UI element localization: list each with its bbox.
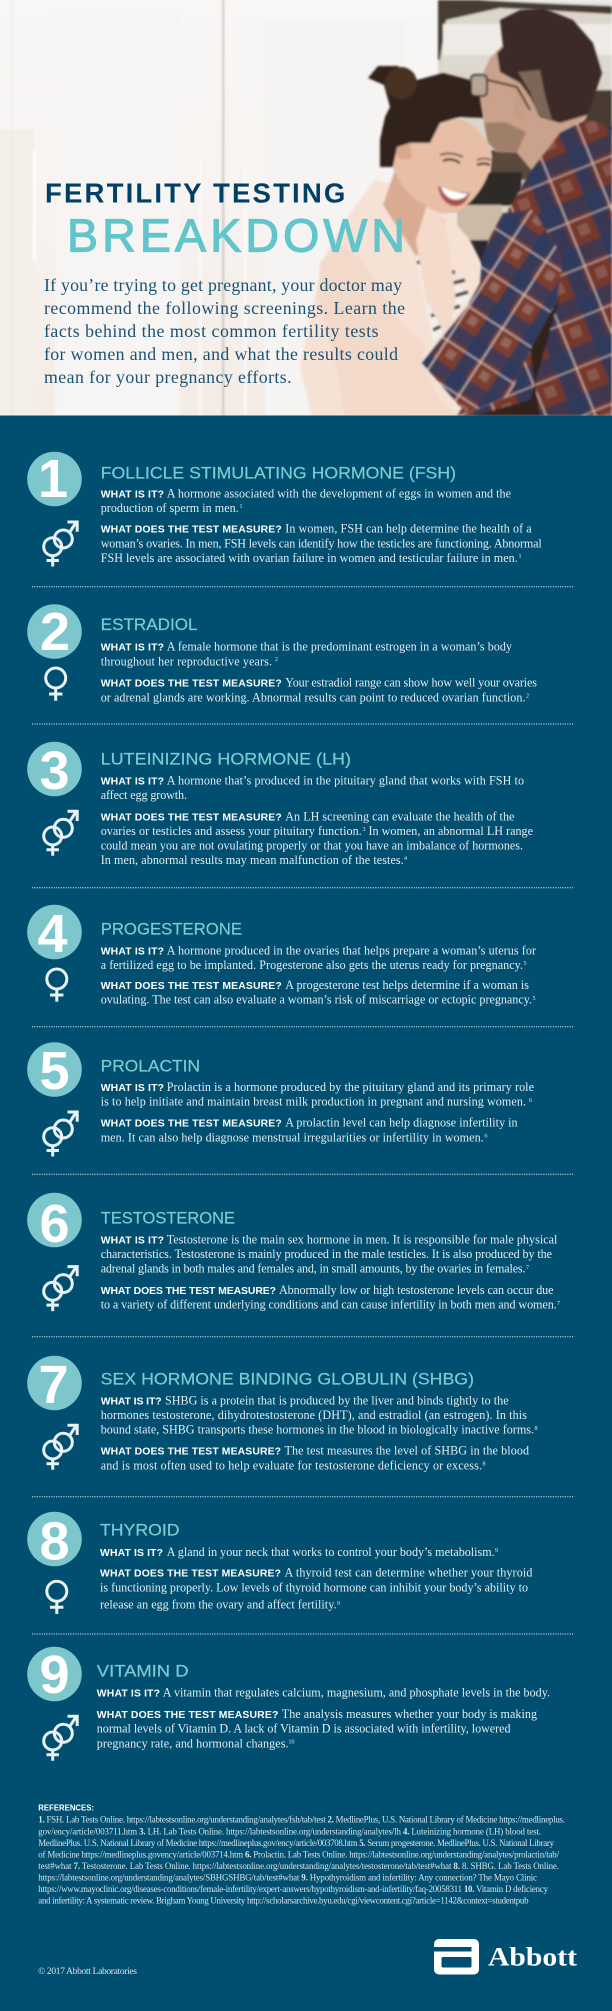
hero photo: couple embracing in a kitchen — [0, 0, 612, 416]
section 1: FSH — [27, 449, 542, 566]
what is it: WHAT IS IT? — [101, 1235, 164, 1246]
what does the test measure: WHAT DOES THE TEST MEASURE? — [101, 525, 282, 536]
what does the test measure — [97, 1707, 537, 1750]
what does the test measure: and is most often used to help evaluate for testosterone deficiency or excess. — [101, 1458, 482, 1472]
what is it: characteristics. Testosterone is mainly produced in the male testicles. It is also produced by the — [101, 1247, 552, 1261]
heading: PROGESTERONE — [101, 920, 242, 939]
what is it — [101, 773, 524, 802]
what does the test measure: pregnancy rate, and hormonal changes. — [97, 1736, 288, 1750]
what is it: a fertilized egg to be implanted. Progesterone also gets the uterus ready for pregnancy. — [101, 958, 523, 972]
what is it: 5 — [524, 961, 526, 967]
what does the test measure: men. It can also help diagnose menstrual irregularities or infertility in women. — [101, 1130, 484, 1144]
what is it: is to help initiate and maintain breast milk production in pregnant and nursing women. — [101, 1095, 526, 1109]
intro text: facts behind the most common fertility tests — [44, 321, 379, 341]
what is it: 9 — [495, 1548, 498, 1554]
what does the test measure: 8 — [482, 1462, 486, 1468]
heading: FOLLICLE STIMULATING HORMONE (FSH) — [101, 464, 456, 483]
what does the test measure — [101, 1444, 529, 1472]
copyright: © 2017 Abbott Laboratories — [38, 1966, 137, 1977]
what does the test measure — [101, 676, 537, 704]
icon: male and female symbols — [44, 522, 77, 566]
references: of Medicine https://medlineplus.govency/article/003714.htm 6. Prolactin. Lab Tests Online. https://labtestsonline.org/understanding/analytes/prolactin/tab/ — [38, 1849, 560, 1859]
what is it — [101, 486, 511, 515]
number badge 6 — [27, 1193, 82, 1254]
references: and infertility: A systematic review. Brigham Young University http://scholarsarchive.byu.edu/cgi/viewcontent.cgi?article=1142&context=studentpub — [38, 1896, 529, 1906]
section 2: Estradiol — [27, 602, 537, 704]
what is it: WHAT IS IT? — [101, 643, 164, 654]
references: MedlinePlus. U.S. National Library of Medicine https://medlineplus.gov/ency/article/003708.htm 5. Serum progesterone. MedlinePlus. U.S. National Library — [38, 1838, 555, 1848]
what is it: WHAT IS IT? — [100, 1548, 163, 1559]
what is it: A vitamin that regulates calcium, magnesium, and phosphate levels in the body. — [163, 1686, 550, 1700]
what does the test measure: WHAT DOES THE TEST MEASURE? — [101, 679, 282, 690]
number badge 6: 6 — [39, 1194, 70, 1254]
what does the test measure: In men, abnormal results may mean malfunction of the testes. — [101, 853, 404, 867]
what does the test measure — [101, 522, 542, 565]
what does the test measure: 4 — [404, 856, 407, 862]
section 7: SHBG — [27, 1355, 537, 1472]
heading: SEX HORMONE BINDING GLOBULIN (SHBG) — [101, 1369, 474, 1388]
references: https://labtestsonline.org/understanding/analytes/SBHGSHBG/tab/test#what 9. Hypothyroidism and infertility: Any connection? The Mayo Clinic — [38, 1872, 537, 1882]
Abbott logo: Abbott — [488, 1943, 577, 1972]
references: test#what 7. Testosterone. Lab Tests Online. https://labtestsonline.org/understanding/analytes/testosterone/tab/test#what 8. 8. SHBG. Lab Tests Online. — [38, 1861, 559, 1871]
what is it: WHAT IS IT? — [97, 1689, 160, 1700]
what is it: 8 — [534, 1426, 538, 1432]
what does the test measure: 10 — [288, 1740, 294, 1746]
references: gov/ency/article/003711.htm 3. LH. Lab Tests Online. https://labtestsonline.org/understanding/analytes/lh 4. Luteinizing hormone (LH) blood test. — [38, 1826, 541, 1836]
number badge 7 — [27, 1355, 82, 1415]
heading: TESTOSTERONE — [101, 1208, 235, 1227]
number badge 7: 7 — [38, 1355, 69, 1415]
what does the test measure: An LH screening can evaluate the health of the — [285, 809, 514, 823]
what does the test measure: WHAT DOES THE TEST MEASURE? — [101, 1447, 281, 1458]
icon: male and female symbols — [44, 1425, 77, 1470]
what is it — [101, 1232, 558, 1276]
number badge 3: 3 — [39, 741, 70, 801]
what does the test measure: release an egg from the ovary and affect fertility. — [100, 1598, 336, 1612]
what is it: A gland in your neck that works to control your body’s metabolism. — [167, 1545, 495, 1559]
section 5: Prolactin — [27, 1041, 534, 1156]
title — [45, 177, 405, 262]
what does the test measure: WHAT DOES THE TEST MEASURE? — [100, 1569, 281, 1580]
what is it — [101, 640, 512, 668]
what does the test measure: The test measures the level of SHBG in the blood — [284, 1444, 529, 1458]
cabinet doors — [0, 0, 405, 416]
what is it — [101, 1393, 537, 1437]
references: REFERENCES: — [38, 1803, 94, 1813]
number badge 4: 4 — [37, 904, 68, 964]
what is it: SHBG is a protein that is produced by the liver and binds tightly to the — [165, 1393, 509, 1407]
icon: female symbol — [47, 1581, 67, 1614]
Abbott logo — [432, 1939, 577, 1974]
section 3: LH — [27, 741, 533, 867]
what is it: WHAT IS IT? — [101, 489, 164, 500]
number badge 3 — [27, 741, 82, 801]
icon: male and female symbols — [44, 1112, 77, 1156]
what is it: 7 — [526, 1265, 529, 1271]
what is it: production of sperm in men. — [101, 501, 239, 515]
what does the test measure: to a variety of different underlying conditions and can cause infertility in both men and women. — [101, 1298, 557, 1312]
number badge 9 — [27, 1645, 82, 1705]
heading: VITAMIN D — [97, 1662, 188, 1681]
number badge 2 — [27, 602, 82, 662]
number badge 1: 1 — [38, 449, 68, 509]
what does the test measure: WHAT DOES THE TEST MEASURE? — [101, 981, 282, 992]
what does the test measure: 6 — [484, 1134, 488, 1140]
what does the test measure: A prolactin level can help diagnose infertility in — [285, 1116, 518, 1130]
what is it — [101, 1080, 534, 1109]
icon: female symbol — [47, 969, 67, 1002]
what is it: 2 — [275, 657, 278, 663]
what does the test measure: woman’s ovaries. In men, FSH levels can identify how the testicles are functioning. Abnormal — [101, 536, 542, 550]
section 8: Thyroid — [27, 1512, 532, 1614]
number badge 8 — [27, 1512, 82, 1572]
what is it: WHAT IS IT? — [101, 1083, 164, 1094]
what does the test measure: ovulating. The test can also evaluate a woman’s risk of miscarriage or ectopic pregnancy. — [101, 993, 532, 1007]
section 6: Testosterone — [27, 1193, 560, 1312]
what does the test measure: Your estradiol range can show how well your ovaries — [285, 676, 537, 690]
what is it: throughout her reproductive years. — [101, 654, 272, 668]
title: BREAKDOWN — [67, 210, 405, 262]
what does the test measure: 9 — [337, 1601, 340, 1607]
intro text — [44, 275, 405, 387]
plaid shirt — [422, 119, 612, 416]
what does the test measure: 2 — [526, 694, 529, 700]
what does the test measure: Abnormally low or high testosterone levels can occur due — [279, 1283, 554, 1297]
what does the test measure: WHAT DOES THE TEST MEASURE? — [101, 812, 282, 823]
heading: ESTRADIOL — [101, 615, 198, 634]
what is it: WHAT IS IT? — [101, 776, 164, 787]
icon: Abbott mark — [432, 1939, 479, 1974]
icon: female symbol — [46, 668, 66, 701]
blue content panel — [0, 416, 612, 2011]
what is it: affect egg growth. — [101, 788, 187, 802]
heading: PROLACTIN — [101, 1057, 200, 1076]
what is it: A hormone that’s produced in the pituitary gland that works with FSH to — [167, 773, 524, 787]
what does the test measure — [100, 1566, 532, 1612]
what does the test measure: The analysis measures whether your body is making — [282, 1707, 537, 1721]
number badge 9: 9 — [39, 1645, 70, 1705]
intro text: for women and men, and what the results could — [44, 344, 398, 364]
heading: LUTEINIZING HORMONE (LH) — [101, 749, 351, 768]
what does the test measure: or adrenal glands are working. Abnormal results can point to reduced ovarian function. — [101, 690, 525, 704]
what does the test measure: WHAT DOES THE TEST MEASURE? — [97, 1710, 278, 1721]
number badge 1 — [27, 449, 82, 509]
what does the test measure: could mean you are not ovulating properly or that you have an imbalance of hormones. — [101, 838, 523, 852]
what is it: WHAT IS IT? — [101, 946, 164, 957]
what is it: bound state, SHBG transports these hormones in the blood in biologically inactive forms. — [101, 1423, 534, 1437]
man — [471, 8, 602, 172]
icon: male and female symbols — [44, 811, 77, 856]
number badge 8: 8 — [39, 1512, 70, 1572]
icon: male and female symbols — [44, 1716, 77, 1761]
what does the test measure: is functioning properly. Low levels of thyroid hormone can inhibit your body’s ability to — [100, 1580, 528, 1594]
what does the test measure: WHAT DOES THE TEST MEASURE? — [101, 1286, 276, 1297]
number badge 4 — [27, 904, 82, 964]
what is it: 6 — [529, 1098, 532, 1104]
kitchen background — [438, 0, 612, 302]
what does the test measure: A thyroid test can determine whether your thyroid — [284, 1566, 532, 1580]
section 9: Vitamin D — [27, 1645, 550, 1761]
heading: THYROID — [100, 1521, 180, 1540]
what does the test measure — [101, 1116, 518, 1144]
references — [38, 1803, 565, 1906]
intro text: If you’re trying to get pregnant, your doctor may — [44, 275, 402, 295]
what does the test measure: In women, an abnormal LH range — [368, 824, 533, 838]
what does the test measure — [101, 1283, 560, 1312]
title: FERTILITY TESTING — [45, 177, 345, 208]
what is it: Testosterone is the main sex hormone in men. It is responsible for male physical — [167, 1232, 558, 1246]
what is it: hormones testosterone, dihydrotestosterone (DHT), and estradiol (an estrogen). In this — [101, 1408, 527, 1422]
references: https://www.mayoclinic.org/diseases-conditions/female-infertility/expert-answers/hypothyroidism-and-infertility/faq-20058311 10. Vitamin D deficiency — [38, 1884, 549, 1894]
what does the test measure: FSH levels are associated with ovarian failure in women and testicular failure in men. — [101, 551, 518, 565]
number badge 2: 2 — [40, 602, 70, 662]
what is it: adrenal glands in both males and females and, in small amounts, by the ovaries in females. — [101, 1262, 525, 1276]
what does the test measure: 1 — [518, 554, 522, 560]
intro text: mean for your pregnancy efforts. — [44, 367, 292, 387]
what is it: WHAT IS IT? — [101, 1396, 162, 1407]
what does the test measure: A progesterone test helps determine if a woman is — [285, 978, 529, 992]
what does the test measure: ovaries or testicles and assess your pituitary function. — [101, 824, 362, 838]
what does the test measure: 3 — [362, 827, 366, 833]
what does the test measure: In women, FSH can help determine the health of a — [285, 522, 532, 536]
what does the test measure — [101, 809, 533, 867]
what does the test measure: WHAT DOES THE TEST MEASURE? — [101, 1119, 282, 1130]
woman — [300, 66, 500, 416]
what is it — [101, 943, 536, 972]
what does the test measure: normal levels of Vitamin D. A lack of Vitamin D is associated with infertility, lowered — [97, 1722, 511, 1736]
what is it: A hormone produced in the ovaries that helps prepare a woman’s uterus for — [167, 943, 536, 957]
number badge 5 — [27, 1041, 82, 1101]
references: 1. FSH. Lab Tests Online. https://labtestsonline.org/understanding/analytes/fsh/tab/test 2. MedlinePlus, U.S. National Library of Medicine https://medlineplus. — [38, 1815, 565, 1825]
what does the test measure: 7 — [557, 1301, 560, 1307]
what is it: Prolactin is a hormone produced by the pituitary gland and its primary role — [167, 1080, 534, 1094]
number badge 5: 5 — [39, 1041, 70, 1101]
what is it: 1 — [240, 504, 242, 510]
intro text: recommend the following screenings. Learn the — [44, 298, 405, 318]
what does the test measure — [101, 978, 535, 1007]
what does the test measure: 5 — [532, 996, 536, 1002]
icon: male and female symbols — [44, 1267, 77, 1311]
section 4: Progesterone — [27, 904, 536, 1007]
what is it: A hormone associated with the development of eggs in women and the — [167, 486, 511, 500]
what is it: A female hormone that is the predominant estrogen in a woman’s body — [167, 640, 512, 654]
